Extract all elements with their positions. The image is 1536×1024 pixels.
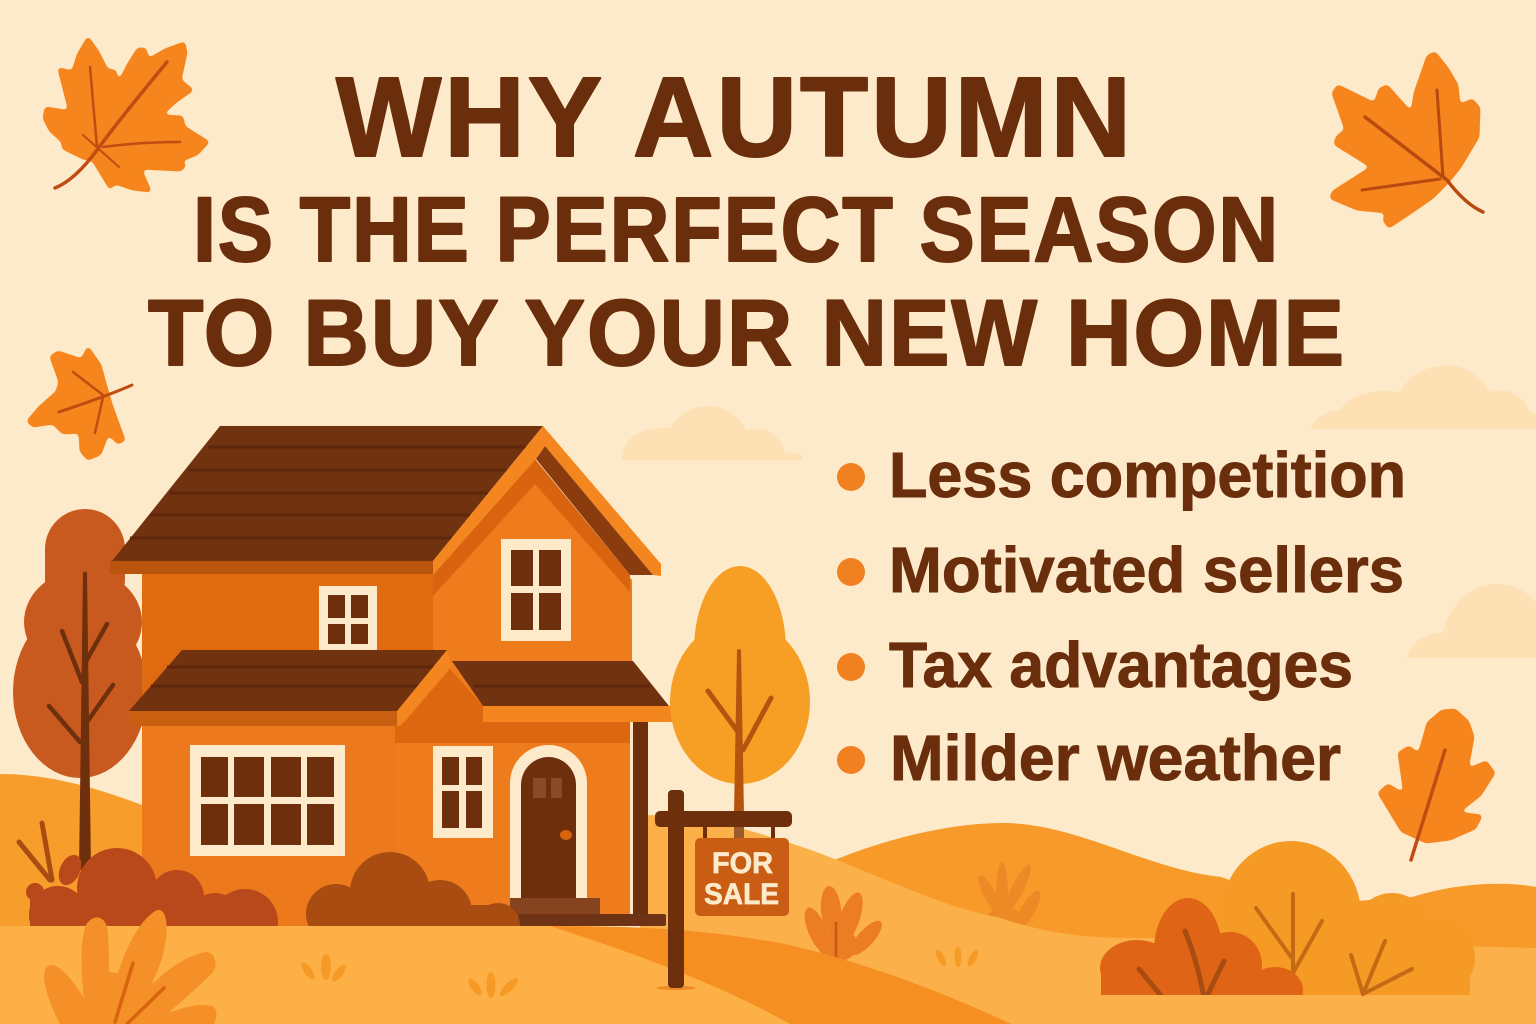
- for sale sign: SALE: [704, 878, 779, 911]
- band below porch: [395, 722, 630, 743]
- sign post: [668, 790, 684, 988]
- tuft: foreground left: [299, 954, 348, 983]
- plant: on light hill: [800, 885, 887, 961]
- title line 3: TO BUY YOUR NEW HOME: [148, 280, 1346, 385]
- window: beside door: [433, 746, 493, 838]
- tuft: right hill: [934, 947, 981, 968]
- tuft: foreground center: [466, 972, 520, 998]
- twigs: red bush: [1139, 931, 1224, 998]
- sign ground shadow: [656, 986, 696, 990]
- gable fascia: [433, 426, 661, 576]
- cloud: center: [622, 406, 802, 460]
- leaf: top left: [44, 38, 208, 191]
- bullet: tax advantages: Tax advantages: [889, 629, 1353, 701]
- leaf: top right: [1331, 53, 1483, 227]
- house: [110, 426, 672, 926]
- lower wall: [142, 720, 397, 926]
- leaf: small left: [28, 348, 132, 459]
- ground: foreground: [0, 926, 790, 1024]
- cloud: lower right: [1407, 584, 1536, 658]
- plant: on back hill: [974, 862, 1045, 933]
- sign text: FOR: [712, 847, 773, 880]
- title: [148, 54, 1346, 385]
- wall sliver: [630, 722, 633, 916]
- tree: right orange tree: [670, 566, 810, 815]
- door: [510, 745, 587, 898]
- bullet: milder weather: Milder weather: [890, 722, 1341, 794]
- gable dark band: [536, 446, 653, 575]
- gable inner shadow: [433, 459, 630, 596]
- leaf: lower right: [1379, 710, 1494, 860]
- lower roof: [129, 650, 447, 726]
- gable wall: [433, 470, 632, 664]
- title line 2: IS THE PERFECT SEASON: [193, 179, 1280, 281]
- hill: far left: [0, 774, 160, 930]
- steps: [510, 898, 666, 926]
- bullet: less competition: Less competition: [889, 439, 1406, 511]
- grass: left of house: [19, 823, 52, 880]
- bush: large orange right: [1221, 841, 1475, 998]
- window: small upper: [319, 586, 377, 652]
- lower right wall: [395, 664, 630, 926]
- for sale sign: [655, 790, 792, 990]
- porch gable shade: [403, 669, 483, 724]
- title line 1: WHY AUTUMN: [336, 54, 1134, 180]
- porch post: [633, 722, 648, 916]
- plant: bottom left foreground: [44, 910, 216, 1024]
- cloud: upper right: [1310, 365, 1536, 429]
- hill: light ground base: [640, 815, 1536, 1024]
- bush: red, left of house: [26, 848, 278, 926]
- twigs: orange bush: [1256, 894, 1412, 994]
- window: gable: [501, 539, 571, 641]
- porch gable frame: [397, 650, 452, 726]
- window: big lower: [190, 745, 345, 856]
- bush: brown, right of house: [306, 852, 520, 926]
- sign hooks: [703, 827, 707, 839]
- main roof: [110, 426, 543, 574]
- hill: darker foreground hill: [540, 926, 1011, 1024]
- sign arm: [655, 811, 792, 827]
- sign board: [695, 838, 789, 916]
- bush: red-orange right: [1100, 898, 1303, 995]
- tree: left red tree: [13, 509, 147, 870]
- porch roof: [452, 661, 672, 722]
- bullet list: [837, 439, 1406, 794]
- upper wall: [142, 574, 433, 724]
- hill: back right: [820, 823, 1536, 965]
- bullet: motivated sellers: Motivated sellers: [889, 534, 1404, 606]
